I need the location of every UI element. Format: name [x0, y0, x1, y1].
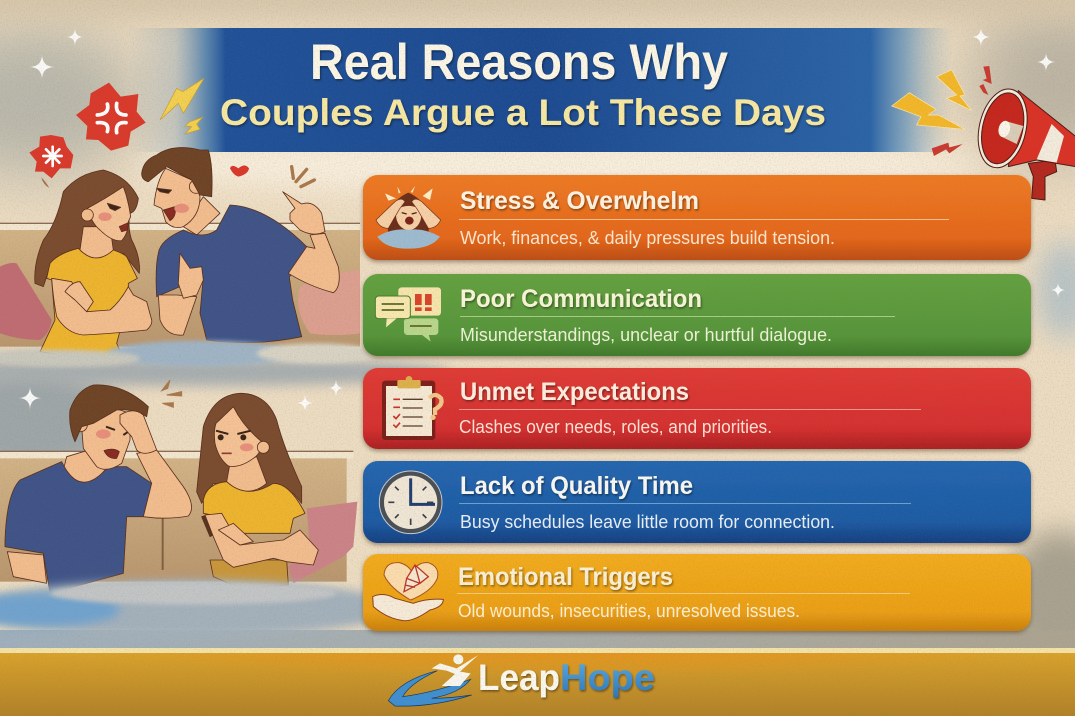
woman with crossed arms	[197, 393, 318, 588]
yellow bolts	[892, 70, 972, 129]
title: Couples Argue a Lot These Days	[220, 92, 826, 133]
description: Clashes over needs, roles, and priorities.	[459, 416, 772, 437]
sofa backdrop	[0, 451, 357, 583]
woman arguing	[35, 170, 152, 356]
emphasis marks	[292, 167, 314, 187]
blanket fog	[0, 341, 377, 367]
logo: LeapHope	[388, 654, 655, 706]
icon: speech bubbles	[375, 287, 441, 342]
heading: Unmet Expectations	[460, 378, 689, 406]
heading: Stress & Overwhelm	[460, 187, 699, 215]
card: poor communication	[363, 274, 1031, 356]
megaphone and bolts	[892, 66, 1075, 200]
footer band	[0, 648, 1075, 716]
red sparks	[932, 66, 992, 156]
logo: LeapHope: Hope	[560, 657, 655, 698]
description: Work, finances, & daily pressures build tension.	[460, 227, 835, 248]
title	[220, 34, 826, 133]
icon: broken heart in hand	[373, 563, 443, 621]
icon: stressed person	[376, 186, 441, 249]
blanket fog	[0, 580, 400, 637]
man with hand on head	[5, 385, 192, 593]
logo wordmark: Leap	[478, 657, 560, 698]
card: unmet expectations	[363, 368, 1031, 449]
emphasis marks	[162, 380, 182, 407]
sparkles	[18, 27, 1066, 412]
heading: Poor Communication	[460, 285, 702, 313]
logo mark	[388, 654, 478, 706]
heading: Emotional Triggers	[458, 563, 673, 591]
description: Old wounds, insecurities, unresolved issues.	[458, 600, 800, 621]
illustration: couple arguing	[0, 78, 377, 367]
description: Misunderstandings, unclear or hurtful dialogue.	[460, 324, 832, 345]
illustration: couple upset	[0, 380, 400, 637]
card: lack of quality time	[363, 461, 1031, 543]
icon: clock	[379, 471, 442, 534]
icon: clipboard	[382, 376, 442, 440]
megaphone body	[971, 84, 1075, 200]
card: emotional triggers	[363, 554, 1031, 631]
description: Busy schedules leave little room for connection.	[460, 511, 835, 532]
heading: Lack of Quality Time	[460, 472, 693, 500]
man shouting	[142, 148, 339, 343]
lightning bolts	[160, 78, 204, 134]
sofa backdrop	[0, 223, 360, 347]
title banner	[128, 28, 953, 152]
title: Real Reasons Why	[310, 34, 728, 90]
angry burst large	[76, 83, 146, 151]
red heart mark	[230, 165, 249, 177]
angry burst small	[29, 135, 73, 188]
card: stress and overwhelm	[363, 175, 1031, 260]
